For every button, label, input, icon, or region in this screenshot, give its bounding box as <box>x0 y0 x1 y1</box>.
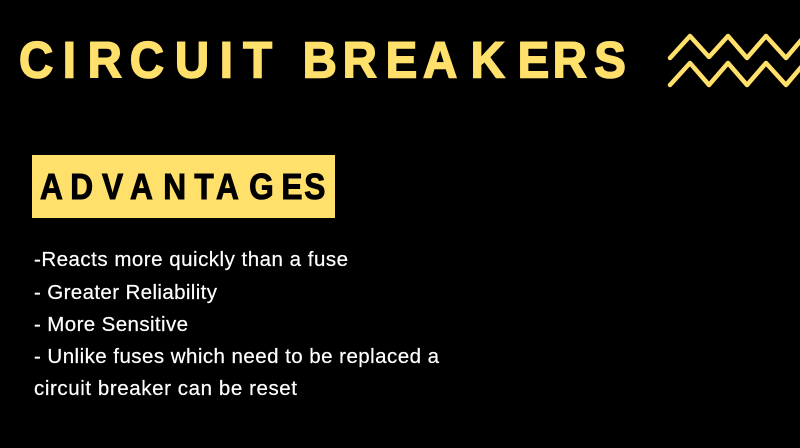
panel: advantages heading: ADVANTAGES <box>40 167 325 207</box>
text block: advantages list: - Greater Reliability <box>34 281 218 304</box>
panel: advantages heading <box>32 155 335 218</box>
title: CIRCUIT BREAKERS <box>19 32 626 89</box>
text block: advantages list <box>34 248 440 400</box>
text block: advantages list: circuit breaker can be reset <box>34 377 297 400</box>
icon: zigzag lines <box>670 36 800 85</box>
text block: advantages list: - Unlike fuses which need to be replaced a <box>34 345 440 368</box>
text block: advantages list: - More Sensitive <box>34 313 188 336</box>
text block: advantages list: -Reacts more quickly than a fuse <box>34 248 348 271</box>
